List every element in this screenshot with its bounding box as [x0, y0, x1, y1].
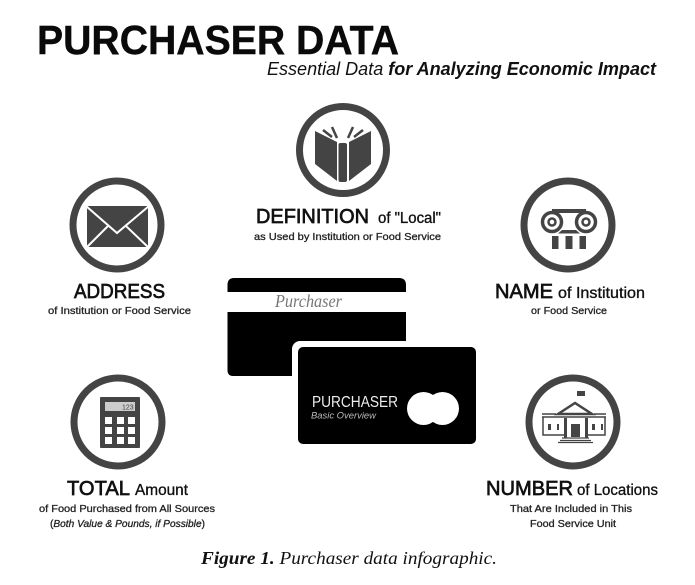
icon: book — [300, 106, 386, 194]
card front: PURCHASER — [312, 394, 398, 411]
heading: definition: DEFINITION — [256, 205, 369, 228]
heading: definition: of "Local" — [378, 210, 441, 227]
heading: total: Amount — [135, 482, 189, 499]
heading: total — [39, 477, 215, 530]
card back — [227, 278, 407, 376]
heading: name: NAME — [495, 280, 553, 303]
heading: name — [495, 280, 645, 317]
heading: number: That Are Included in This — [510, 503, 632, 515]
title: PURCHASER DATA — [37, 17, 399, 63]
heading: number: of Locations — [577, 482, 658, 499]
heading: name: or Food Service — [531, 305, 607, 317]
heading: address: ADDRESS — [74, 280, 165, 303]
icon: envelope — [73, 181, 161, 269]
heading: name: of Institution — [558, 285, 645, 302]
subtitle: Essential Data for Analyzing Economic Impact — [267, 59, 657, 79]
card front — [292, 341, 482, 451]
heading: total: TOTAL — [67, 477, 130, 500]
heading: definition: as Used by Institution or Food Service — [254, 231, 441, 243]
icon: column capital — [524, 181, 612, 269]
heading: number: Food Service Unit — [530, 518, 616, 530]
heading: total: (Both Value & Pounds, if Possible) — [50, 518, 205, 530]
card front: Basic Overview — [311, 410, 377, 422]
heading: address — [48, 280, 191, 317]
caption: Figure 1. Purchaser data infographic. — [200, 548, 497, 568]
panel: purchaser cards — [227, 278, 482, 451]
card back: Purchaser — [274, 291, 343, 311]
icon: calculator — [74, 378, 162, 466]
icon: building — [529, 378, 617, 466]
heading: number: NUMBER — [486, 477, 573, 500]
icon: calculator: 123 — [122, 404, 134, 412]
heading: address: of Institution or Food Service — [48, 305, 191, 317]
heading: definition — [254, 205, 441, 243]
heading: total: of Food Purchased from All Sources — [39, 503, 215, 515]
heading: number — [486, 477, 658, 530]
